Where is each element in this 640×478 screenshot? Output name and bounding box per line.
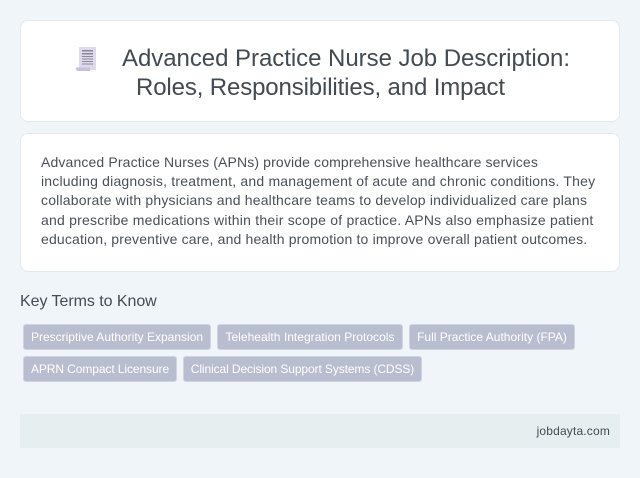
- tag: telehealth: Telehealth Integration Protocols: [225, 330, 395, 344]
- text block: description: Advanced Practice Nurses (APNs) provide comprehensive healthcare services: [41, 154, 538, 170]
- title: Advanced Practice Nurse Job Description:: [122, 45, 570, 72]
- text block: description: education, preventive care, and health promotion to improve overall patient outcomes.: [41, 231, 587, 247]
- tag: APRN compact: [23, 356, 177, 382]
- panel: title header: [20, 20, 620, 122]
- tag: APRN compact: APRN Compact Licensure: [31, 362, 169, 376]
- panel: description: [20, 133, 620, 272]
- text block: description: including diagnosis, treatment, and management of acute and chronic conditions. They: [41, 173, 595, 189]
- text block: description: and prescribe medications within their scope of practice. APNs also emphasize patient: [41, 212, 594, 228]
- footer source: jobdayta.com: [537, 424, 610, 438]
- tag: prescriptive authority: Prescriptive Authority Expansion: [31, 330, 203, 344]
- tag: prescriptive authority: [23, 324, 211, 350]
- text block: description: [41, 154, 596, 247]
- tag: telehealth: [217, 324, 403, 350]
- footer bar: [20, 414, 620, 448]
- tag: full practice authority: Full Practice Authority (FPA): [417, 330, 567, 344]
- tag: clinical decision support: Clinical Decision Support Systems (CDSS): [191, 362, 414, 376]
- tag: clinical decision support: [183, 356, 422, 382]
- title: [122, 45, 570, 101]
- tag: full practice authority: [409, 324, 575, 350]
- text block: description: collaborate with physicians and healthcare teams to develop individualized care plans: [41, 192, 587, 208]
- title: Roles, Responsibilities, and Impact: [136, 74, 505, 101]
- heading: key terms: Key Terms to Know: [20, 293, 157, 310]
- tag list: [23, 324, 575, 382]
- icon: document scroll: [76, 47, 96, 71]
